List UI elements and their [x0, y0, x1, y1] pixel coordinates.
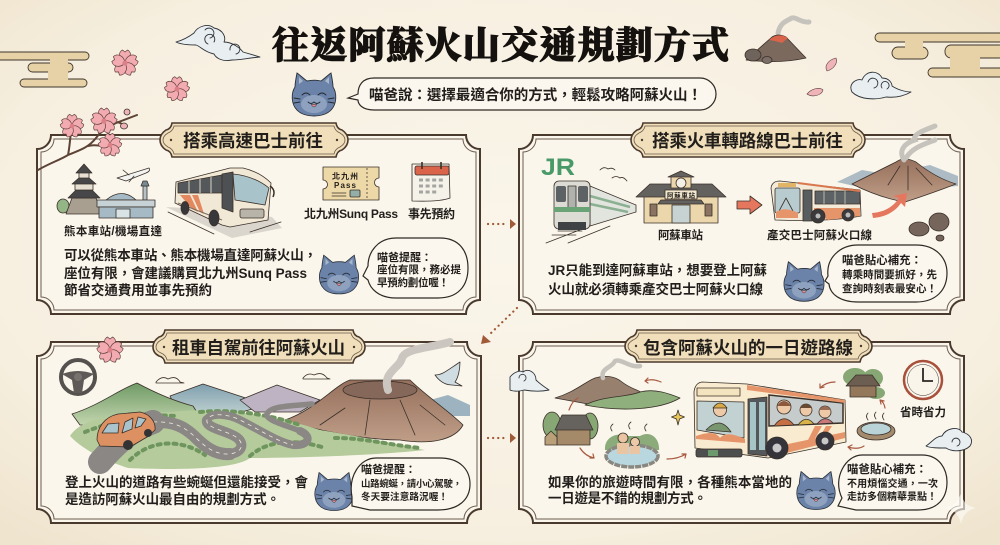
heading banner — [160, 123, 348, 157]
road — [100, 404, 312, 462]
text block: JR只能到達阿蘇車站，想要登上阿蘇 — [548, 262, 768, 278]
title: 往返阿蘇火山交通規劃方式 — [272, 15, 729, 69]
icon: corner sparkle — [945, 492, 976, 524]
label: bus line: 產交巴士阿蘇火口線 — [767, 228, 872, 242]
speech bubble: 不用煩惱交通，一次 — [847, 477, 938, 490]
arrow: curved up — [872, 193, 907, 218]
blue mountain — [170, 384, 267, 418]
cat — [315, 473, 353, 510]
icon: temple — [543, 412, 598, 445]
text block: 火山就必須轉乘產交巴士阿蘇火口線 — [548, 281, 764, 297]
speech bubble — [363, 238, 468, 298]
heading banner: 搭乘火車轉路線巴士前往 — [652, 131, 843, 151]
label: direct from station and airport: 熊本車站/機場直達 — [64, 224, 162, 238]
decoration: sakura flowers and petals — [111, 50, 837, 102]
speech bubble — [825, 245, 947, 302]
arrow: panel 1 to panel 2 — [488, 219, 516, 229]
icon: Aso station: 阿蘇車站 — [667, 190, 696, 200]
arrows: tour loop — [569, 378, 885, 459]
text block: 座位有限，會建議購買北九州Sunq Pass — [64, 265, 307, 281]
decoration: gold cloud left — [0, 52, 89, 87]
icon: castle — [57, 164, 102, 214]
icon: clock — [904, 361, 942, 399]
heading banner — [625, 330, 872, 362]
icon: rocks — [909, 213, 949, 241]
icon: airplane — [117, 168, 150, 182]
cat — [797, 472, 835, 509]
cat — [319, 255, 359, 294]
sakura — [96, 337, 124, 364]
speech bubble: 查詢時刻表最安心！ — [842, 282, 937, 295]
arrow: panel 2 to panel 3 — [481, 308, 517, 344]
speech bubble: 轉乘時間要抓好，先 — [842, 268, 938, 281]
panel frame — [37, 342, 481, 523]
volcano — [285, 380, 463, 442]
green hill — [72, 383, 205, 425]
icon: right cloud — [926, 429, 972, 451]
driver — [706, 403, 731, 432]
heading banner — [631, 123, 865, 157]
icon: highway coach — [166, 168, 282, 238]
text block: 如果你的旅遊時間有限，各種熊本當地的 — [548, 474, 792, 490]
passengers — [774, 400, 833, 426]
icon: volcano with smoke — [837, 126, 958, 202]
panel: day tour — [510, 330, 972, 523]
icon: route bus — [771, 181, 861, 223]
icon: train — [546, 168, 636, 243]
clouds — [156, 374, 330, 383]
icon: left cloud — [510, 370, 549, 391]
car — [97, 412, 155, 450]
icon: onsen with bathers — [605, 422, 659, 467]
label: Aso station: 阿蘇車站 — [658, 228, 704, 242]
speech bubble — [838, 455, 947, 510]
speech bubble: 喵爸貼心補充： — [842, 253, 922, 267]
panel: self drive — [37, 330, 481, 523]
speech bubble: 座位有限，務必提 — [377, 263, 462, 276]
panel: train and bus — [519, 123, 964, 314]
heading banner: 包含阿蘇火山的一日遊路線 — [643, 338, 854, 358]
speech bubble: top — [348, 78, 716, 110]
smoke — [387, 342, 450, 390]
label: Sunq Pass: 北九州Sunq Pass — [304, 207, 398, 221]
decoration: cherry branch — [38, 108, 137, 170]
speech bubble: 山路蜿蜒，請小心駕駛， — [361, 478, 462, 489]
label: save time: 省時省力 — [900, 405, 946, 419]
text block — [548, 474, 792, 506]
text block: 是造訪阿蘇火山最自由的規劃方式。 — [65, 491, 280, 507]
text block — [65, 474, 308, 507]
icon: airport building — [97, 181, 155, 218]
text block: 可以從熊本車站、熊本機場直達阿蘇火山， — [64, 247, 317, 263]
icon: Sunq Pass ticket: 北九州 — [332, 171, 358, 181]
icon: tour bus — [694, 382, 846, 459]
text block: 登上火山的道路有些蜿蜒但還能接受，會 — [65, 474, 308, 490]
icon: Sunq Pass ticket: Pass — [334, 181, 357, 190]
bird — [435, 362, 462, 386]
decoration: gold cloud right — [875, 33, 1000, 77]
icon: Aso station — [636, 171, 726, 223]
speech bubble: 走訪多個精華景點！ — [847, 490, 937, 503]
cat — [784, 262, 824, 301]
speech bubble: 喵爸提醒： — [361, 462, 416, 476]
heading banner: 搭乘高速巴士前往 — [183, 131, 323, 151]
decoration: small volcano — [745, 18, 809, 64]
speech bubble: top: 喵爸說：選擇最適合你的方式，輕鬆攻略阿蘇火山！ — [369, 86, 702, 104]
icon: onsen bowl — [857, 412, 895, 440]
text block — [64, 247, 317, 298]
mascot cat: top — [292, 73, 336, 116]
panel frame — [519, 135, 964, 314]
text block: 一日遊是不錯的規劃方式。 — [548, 490, 707, 506]
speech bubble: 早預約劃位喔！ — [377, 276, 449, 289]
label: reserve: 事先預約 — [408, 206, 455, 221]
speech bubble — [351, 458, 470, 510]
decoration: blue cloud top left — [176, 26, 260, 61]
decoration: blue cloud right — [851, 72, 911, 99]
icon: Sunq Pass ticket — [323, 167, 379, 200]
foliage — [70, 410, 425, 469]
panel frame — [37, 135, 480, 314]
icon: calendar — [412, 162, 450, 201]
icon: JR logo: JR — [541, 154, 575, 181]
far blue mountain right — [430, 395, 470, 416]
purple mountain — [240, 385, 320, 412]
icon: hot spring house — [843, 368, 885, 399]
text block: 節省交通費用並事先預約 — [64, 282, 212, 298]
arrow: panel 3 to panel 4 — [488, 433, 516, 443]
speech bubble: 喵爸提醒： — [377, 250, 432, 264]
illustration: mountains and winding road — [70, 342, 470, 469]
heading banner: 租車自駕前往阿蘇火山 — [172, 338, 345, 358]
icon: day tour volcano — [555, 360, 680, 409]
panel: express bus — [37, 123, 480, 314]
speech bubble: 喵爸貼心補充： — [847, 462, 927, 476]
heading banner — [153, 330, 365, 363]
arrow — [737, 196, 762, 214]
speech bubble: 冬天要注意路況喔！ — [361, 491, 448, 503]
text block — [548, 262, 768, 297]
icon: steering wheel — [61, 360, 95, 394]
panel frame — [519, 342, 964, 523]
icon: sparkle — [672, 410, 684, 425]
